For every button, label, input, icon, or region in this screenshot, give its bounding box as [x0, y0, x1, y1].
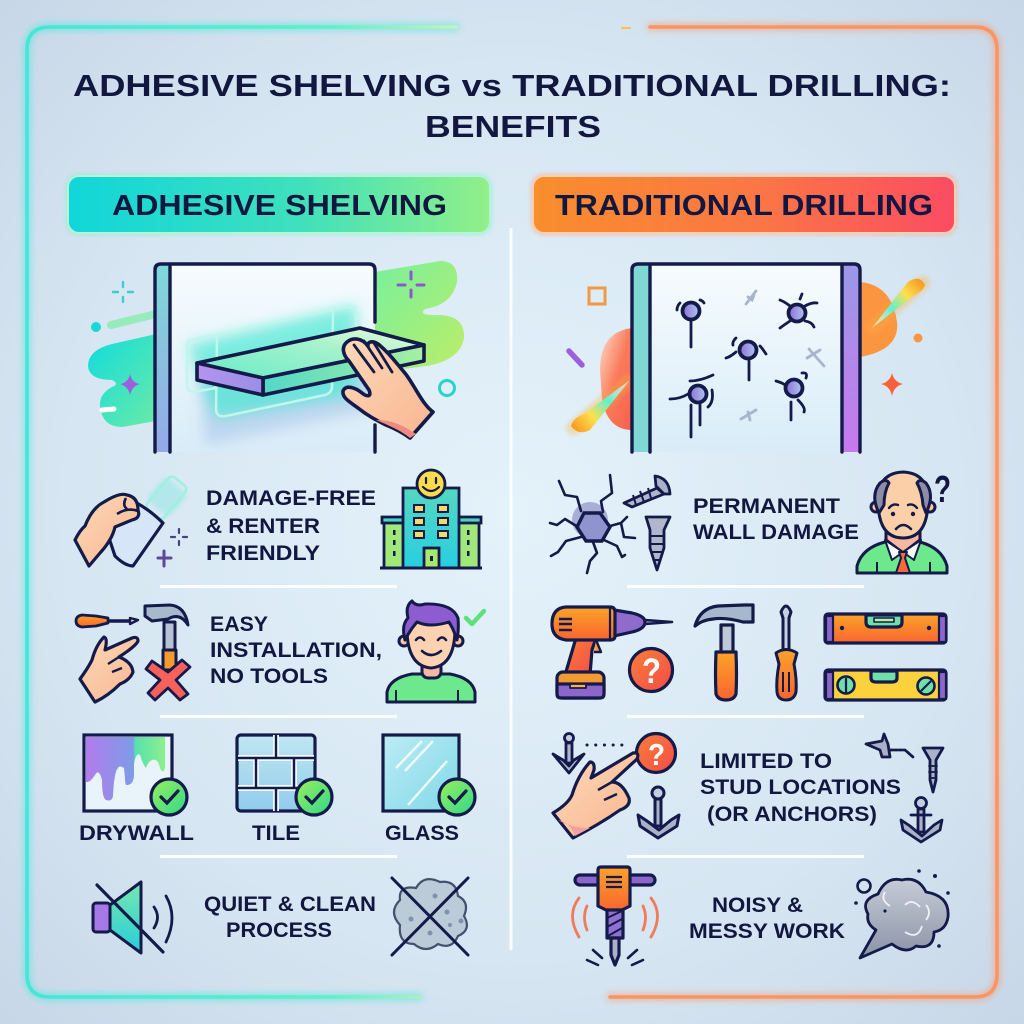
section header: traditional drilling: TRADITIONAL DRILLING [555, 190, 933, 222]
icon: pointing hand [553, 753, 638, 838]
section header: traditional drilling [531, 174, 957, 235]
drywall [79, 735, 194, 845]
row divider lines [160, 585, 864, 858]
text: easy installation, no tools: NO TOOLS [210, 665, 328, 688]
text: noisy and messy work: MESSY WORK [689, 920, 845, 943]
icon: cracked hole [550, 475, 635, 573]
text: noisy and messy work: NOISY & [712, 894, 803, 917]
icon: question badge [636, 734, 676, 772]
shelf [197, 328, 424, 395]
drawback: many tools required [552, 605, 946, 700]
icon: question mark: ? [934, 469, 951, 511]
icon: question badge: ? [648, 737, 665, 772]
text: permanent wall damage [693, 495, 859, 544]
text: damage-free and renter friendly: DAMAGE-FREE [206, 487, 376, 510]
hand holding shelf [343, 339, 433, 438]
icon: smiling apartment building [380, 470, 482, 568]
text: damage-free and renter friendly: FRIENDLY [206, 542, 320, 565]
text: limited to stud locations or anchors: STUD LOCATIONS [700, 776, 901, 799]
icon: screws [624, 476, 670, 570]
icon: orange spirit level [825, 614, 946, 643]
icon: power drill [552, 607, 672, 698]
glass: GLASS [385, 822, 459, 845]
icon: wall anchor and screw [866, 734, 943, 842]
text: limited to stud locations or anchors [700, 750, 901, 826]
drywall: DRYWALL [79, 822, 194, 845]
drill holes [682, 302, 806, 402]
icon: question badge [630, 648, 672, 692]
text: easy installation, no tools: EASY [210, 613, 268, 636]
text: limited to stud locations or anchors: LIMITED TO [700, 750, 832, 773]
icon: hammer [695, 605, 753, 700]
illustration: drilled wall [569, 264, 925, 452]
text: damage-free and renter friendly: & RENTER [206, 515, 320, 538]
text: quiet and clean process [204, 893, 376, 942]
dotted line [587, 744, 622, 746]
tile: TILE [252, 822, 300, 845]
text: permanent wall damage: WALL DAMAGE [693, 521, 859, 544]
icon: question badge: ? [642, 652, 661, 691]
benefit: easy installation, no tools [76, 601, 484, 702]
text: easy installation, no tools [210, 613, 382, 688]
section header: adhesive shelving: ADHESIVE SHELVING [112, 190, 447, 222]
icon: muted speaker [93, 882, 172, 953]
text: damage-free and renter friendly [206, 487, 376, 565]
benefit: damage-free and renter friendly [75, 470, 482, 568]
title [73, 68, 951, 144]
illustration: adhesive shelf on wall [88, 261, 464, 452]
glass [383, 735, 475, 845]
text: easy installation, no tools: INSTALLATION, [210, 639, 382, 662]
icon: hand wiping with cloth [75, 472, 191, 566]
text: quiet and clean process: PROCESS [226, 919, 332, 942]
compatible surfaces [79, 735, 475, 845]
icon: small anchor [553, 734, 584, 773]
icon: worried balding man [857, 472, 947, 573]
icon: screwdriver and crossed-out hammer with pointing hand [76, 605, 190, 702]
icon: screwdriver [776, 606, 797, 700]
text: noisy and messy work [689, 894, 845, 943]
section header: adhesive shelving [66, 174, 492, 235]
icon: dust cloud [854, 869, 950, 958]
drawback: noisy and messy work [572, 867, 950, 965]
benefit: quiet and clean process [93, 878, 468, 955]
center divider [510, 228, 512, 950]
drawback: limited to stud locations [553, 734, 943, 842]
text: limited to stud locations or anchors: (OR ANCHORS) [707, 803, 877, 826]
icon: yellow spirit level [825, 670, 946, 700]
title: ADHESIVE SHELVING vs TRADITIONAL DRILLING: [73, 68, 951, 103]
title: BENEFITS [425, 109, 601, 144]
icon: crossed-out dust cloud [392, 878, 468, 955]
icon: jackhammer [572, 867, 658, 965]
icon: happy person with check mark [387, 601, 484, 702]
text: quiet and clean process: QUIET & CLEAN [204, 893, 376, 916]
tile [237, 735, 332, 845]
text: permanent wall damage: PERMANENT [693, 495, 840, 518]
icon: large anchor [638, 787, 679, 838]
drawback: permanent wall damage [550, 469, 951, 573]
